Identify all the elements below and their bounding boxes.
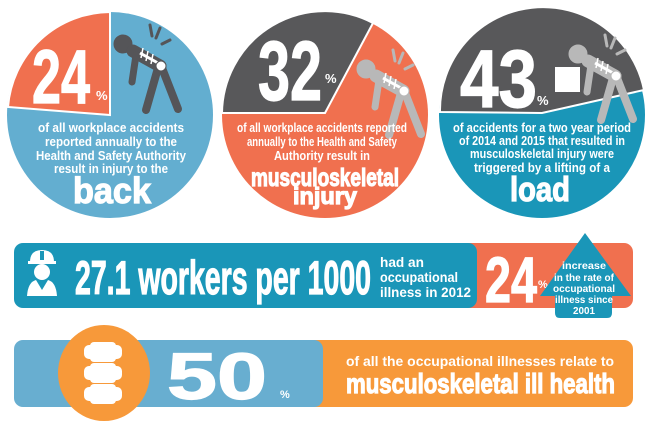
panel: 50% musculoskeletal ill health bar [14, 325, 633, 421]
text block [380, 255, 471, 300]
text block: musculoskeletal [251, 164, 399, 192]
icon: figure [357, 50, 421, 135]
stat 43%: 43 [460, 34, 537, 125]
arrow: increase: illness since [555, 295, 613, 306]
stat 50%: 50 [167, 339, 267, 413]
icon: lifting figure with box [555, 35, 633, 120]
panel: workers per 1000 bar [14, 233, 633, 318]
text block: injury [293, 183, 357, 209]
icon: worker hard hat [27, 250, 57, 296]
stat 24%: 24 [485, 244, 537, 316]
stat text: 27.1 workers per 1000 [75, 251, 371, 304]
text block: of 2014 and 2015 that resulted in [459, 134, 625, 148]
text block: Authority result in [274, 149, 370, 163]
arrow: increase: occupational [553, 284, 615, 295]
stat 43%: % [537, 93, 549, 108]
stat 32%: % [325, 71, 337, 86]
stat 32%: 32 [258, 24, 322, 118]
text block: back [73, 170, 152, 211]
text block: of accidents for a two year period [453, 121, 631, 135]
icon: back pain figure [114, 25, 178, 110]
panel: lifting load circle [439, 7, 645, 218]
text block: result in injury to the [54, 162, 168, 176]
arrow: increase [540, 233, 631, 318]
panel: back injury circle [7, 12, 213, 218]
text block [36, 121, 186, 211]
text block: illness in 2012 [380, 285, 471, 300]
stat 24%: 24 [32, 35, 90, 120]
icon: spine in orange circle [58, 325, 150, 421]
text block [237, 121, 407, 209]
text block: occupational [380, 270, 458, 285]
text block: of all workplace accidents reported [237, 121, 407, 135]
text block: of all the occupational illnesses relate to [346, 354, 614, 369]
text block: Health and Safety Authority [36, 149, 186, 163]
text block: load [510, 171, 570, 209]
text block: annually to the Health and Safety [247, 135, 397, 149]
arrow: increase: increase [562, 261, 606, 272]
text block [346, 354, 615, 399]
stat 24%: % [96, 88, 108, 103]
arrow: increase: 2001 [573, 306, 595, 317]
arrow: increase: in the rate of [554, 273, 615, 284]
text block: reported annually to the [45, 135, 177, 149]
text block: musculoskeletal injury were [470, 147, 614, 161]
text block: of all workplace accidents [38, 121, 184, 135]
text block: had an [380, 255, 424, 270]
text block [453, 121, 631, 209]
stat 24%: % [538, 279, 548, 291]
stat 50% [167, 339, 290, 413]
panel: musculoskeletal circle [222, 11, 428, 218]
stat 50%: % [280, 389, 290, 401]
text block: triggered by a lifting of a [474, 161, 611, 175]
